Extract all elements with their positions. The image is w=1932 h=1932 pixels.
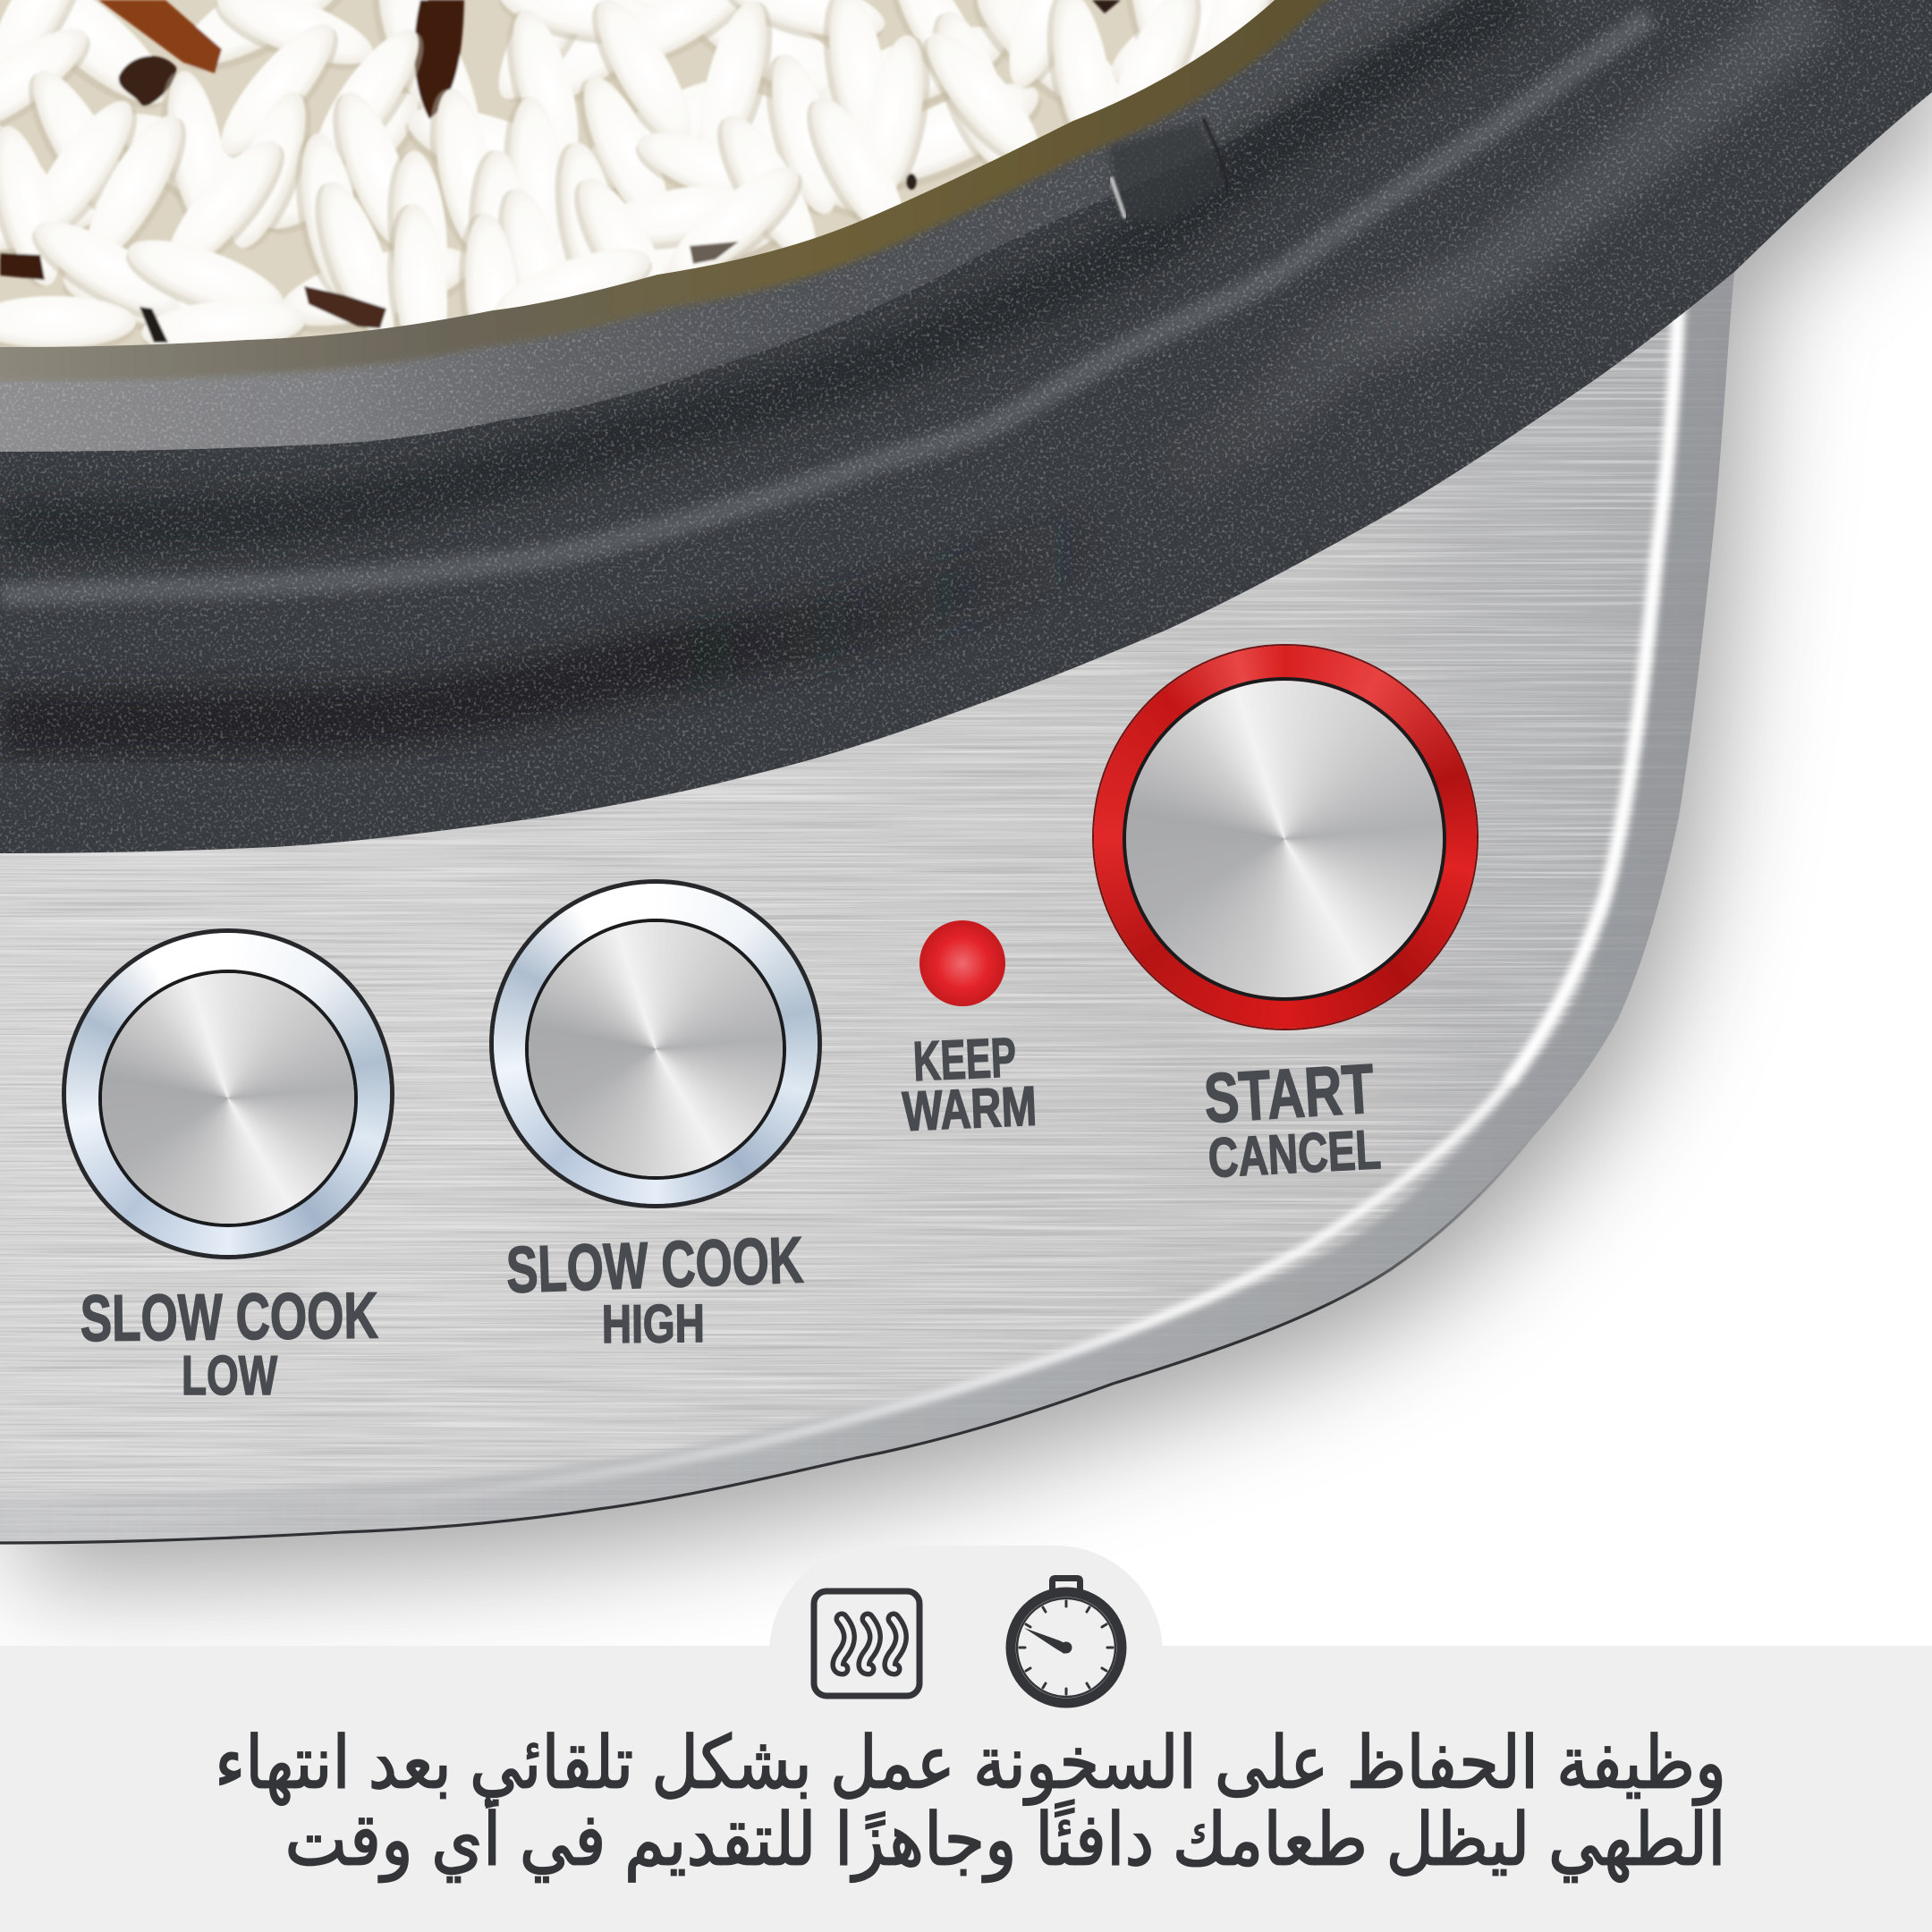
- label: keep warm: KEEP: [912, 1027, 1018, 1093]
- body highlight strip: [1512, 295, 1679, 1078]
- label: slow cook low: LOW: [182, 1345, 277, 1407]
- label: slow cook low: SLOW COOK: [80, 1280, 378, 1355]
- icon: stopwatch: [1011, 1575, 1122, 1703]
- sheen ridge: [0, 18, 1649, 595]
- rim notch: [1109, 118, 1227, 224]
- label: start cancel: CANCEL: [1207, 1119, 1382, 1190]
- label: start cancel: START: [1202, 1049, 1377, 1138]
- knob: slow cook low: [102, 973, 354, 1224]
- knob: start cancel: [1126, 681, 1443, 997]
- body lip band: [0, 224, 1734, 1543]
- dark groove: [0, 0, 1521, 528]
- button: slow cook low: [66, 933, 390, 1255]
- label: slow cook high: SLOW COOK: [505, 1224, 805, 1307]
- stainless steel body: [0, 224, 1753, 1556]
- caption: first line: وظيفة الحفاظ على السخونة عمل بشكل تلقائي بعد انتهاء: [215, 1723, 1726, 1804]
- label: slow cook high: HIGH: [602, 1293, 705, 1354]
- textured upper band: [0, 0, 1467, 452]
- soft shadow under the cooker: [20, 27, 1932, 1579]
- label: slow cook low: [80, 1280, 378, 1407]
- speckled rim texture: [0, 0, 1932, 859]
- lower wild rice grains: [0, 0, 1121, 343]
- icon: heat in oven box: [814, 1591, 919, 1696]
- wide right sheen: [1236, 0, 1832, 444]
- label: slow cook high: [505, 1224, 805, 1354]
- label: keep warm: WARM: [902, 1076, 1038, 1143]
- knob: slow cook high: [529, 922, 783, 1176]
- button: slow cook high: [494, 884, 818, 1204]
- button: start cancel: [1094, 646, 1477, 1029]
- panel: icon tab: [769, 1546, 1163, 1662]
- shadow groove: [0, 528, 1118, 724]
- dark rim of the cooker: [0, 0, 1932, 859]
- indicator: keep warm light: [919, 920, 1005, 1006]
- panel: bottom caption bar: [0, 1646, 1932, 1932]
- label: start cancel: [1202, 1049, 1382, 1190]
- underlay grains: [0, 0, 1303, 351]
- label: keep warm: [902, 1027, 1038, 1143]
- caption: second line: الطهي ليظل طعامك دافئًا وجاهزًا للتقديم في أي وقت: [285, 1800, 1726, 1881]
- rice in the pot: [0, 0, 1303, 380]
- glass edge of the pot: [0, 0, 1275, 347]
- wild rice grains: [98, 0, 464, 119]
